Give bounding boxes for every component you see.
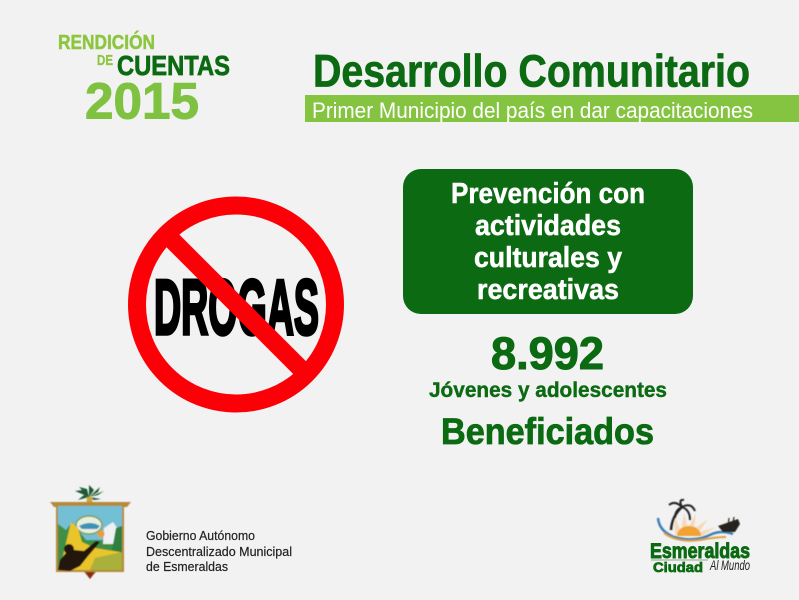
subtitle text: Primer Municipio del país en dar capacitaciones	[312, 98, 753, 123]
logo word: Ciudad: Ciudad	[653, 559, 703, 575]
government name	[146, 528, 292, 574]
logo word: Esmeraldas: Esmeraldas	[650, 540, 750, 563]
sun	[677, 526, 701, 536]
government name: Descentralizado Municipal	[146, 544, 292, 559]
government name: Gobierno Autónomo	[146, 528, 255, 543]
waves	[658, 518, 733, 539]
logo: Esmeraldas Ciudad al Mundo	[650, 500, 750, 575]
logo text: 2015: 2015	[85, 72, 199, 130]
audience label: Jóvenes y adolescentes	[429, 378, 667, 402]
icon: municipal coat of arms	[50, 485, 131, 579]
logo text: de: DE	[97, 52, 113, 69]
icon: no drugs sign	[137, 206, 335, 404]
statistic: beneficiaries	[429, 328, 667, 452]
shield frame	[50, 502, 131, 579]
number: 8.992	[491, 328, 604, 379]
palm tree	[671, 507, 682, 530]
icon: no drugs sign: DROGAS	[154, 263, 319, 351]
panel text: actividades	[475, 210, 621, 242]
title: Desarrollo Comunitario	[313, 46, 750, 96]
panel text: Prevención con	[451, 178, 645, 210]
logo: Rendición de Cuentas 2015	[58, 30, 230, 130]
logo word: Al Mundo: Al Mundo	[709, 557, 750, 573]
silhouette figure	[58, 541, 100, 571]
sun rays	[674, 513, 716, 536]
logo artwork	[658, 500, 740, 541]
subtitle banner	[305, 95, 799, 123]
palm crown	[75, 485, 104, 500]
panel: prevention activities	[403, 169, 693, 314]
logo text: Rendición: RENDICIÓN	[58, 30, 155, 54]
shield landscape	[58, 522, 122, 570]
government name: de Esmeraldas	[146, 559, 228, 574]
logo text: Cuentas: CUENTAS	[117, 50, 230, 81]
beneficiaries label: Beneficiados	[441, 411, 654, 452]
panel text	[451, 178, 645, 306]
panel text: recreativas	[477, 274, 619, 306]
boat	[718, 519, 740, 532]
panel text: culturales y	[474, 242, 622, 274]
